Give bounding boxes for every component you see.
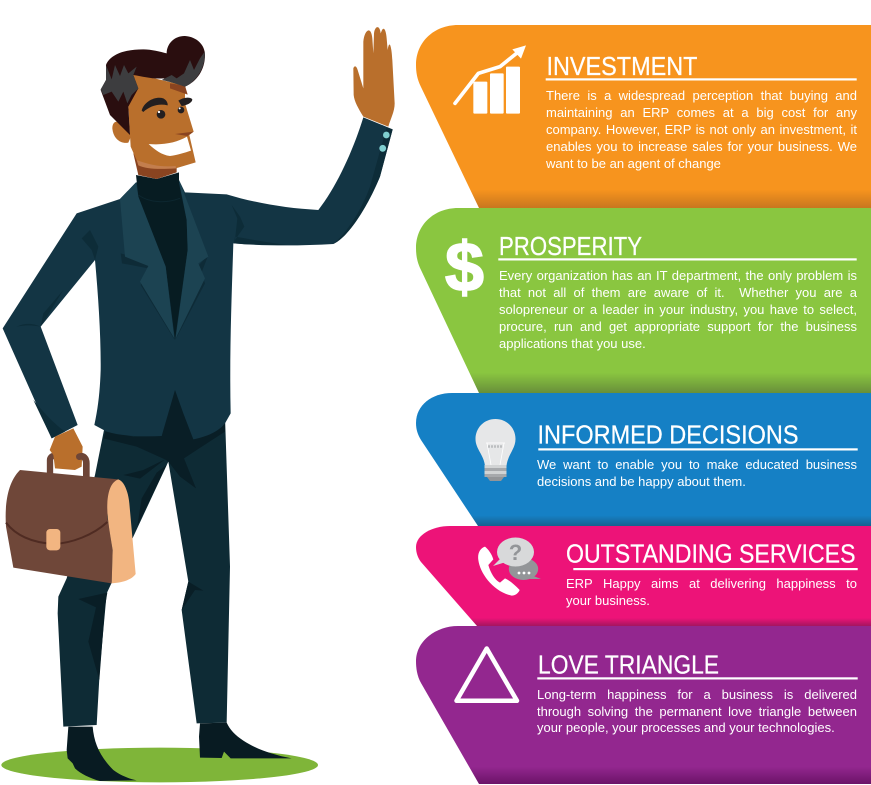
heading: prosperity: PROSPERITY [499, 231, 642, 261]
prosperity text: applications that you use. [499, 336, 646, 351]
cuff buttons [383, 132, 390, 138]
smile [149, 137, 191, 156]
hair [101, 36, 205, 135]
face [128, 73, 196, 168]
heading rule [573, 568, 858, 570]
panel: love triangle [416, 626, 871, 784]
panel: informed decisions [416, 393, 871, 526]
icon: dollar sign: $ [445, 228, 484, 306]
jacket [3, 117, 393, 439]
outstanding services text: ERP Happy aims at delivering happiness to [566, 576, 857, 591]
heading rule [538, 448, 858, 450]
turtleneck [136, 172, 188, 340]
heading: love triangle: LOVE TRIANGLE [538, 649, 719, 679]
cuff button [379, 145, 386, 152]
informed decisions background and icon [416, 393, 871, 526]
investment text [546, 88, 857, 171]
shoes [67, 723, 292, 781]
informed decisions text: We want to enable you to make educated business [537, 457, 857, 472]
ground ellipse [1, 748, 318, 782]
eyes [157, 110, 165, 119]
prosperity text: Every organization has an IT department, the only problem is [499, 268, 857, 283]
icon: phone with speech bubbles [478, 538, 541, 596]
investment text: maintaining an ERP comes at a big cost for any [546, 105, 857, 120]
investment text: There is a widespread perception that buying and [546, 88, 857, 103]
briefcase [6, 456, 136, 583]
outstanding services background and icon [416, 526, 871, 626]
informed decisions text [537, 457, 857, 489]
blue banner [416, 393, 871, 526]
outstanding services text: your business. [566, 593, 650, 608]
love triangle text [537, 687, 857, 735]
investment text: want to be an agent of change [546, 156, 721, 171]
prosperity text [499, 268, 857, 351]
love triangle text: Long-term happiness for a business is delivered [537, 687, 857, 702]
love triangle text: through solving the permanent love triangle between [537, 704, 857, 719]
prosperity text: solopreneur or a leader in your industry, you have to select, [499, 302, 857, 317]
prosperity text: that not all of them are aware of it. Whether you are a [499, 285, 857, 300]
ear [112, 122, 132, 143]
heading rule [498, 258, 857, 260]
neck [133, 153, 177, 179]
lower hand [50, 428, 83, 470]
raised hand [353, 27, 395, 127]
nose shadow [175, 132, 194, 136]
prosperity background and icon [416, 208, 871, 393]
prosperity text: procure, run and get appropriate support for the business [499, 319, 857, 334]
panel: investment [416, 25, 871, 208]
heading rule [546, 78, 857, 80]
heading: informed decisions: INFORMED DECISIONS [538, 419, 798, 449]
panel: prosperity [416, 208, 871, 393]
icon: phone with speech bubbles: ? [509, 540, 522, 565]
eyebrows [142, 98, 168, 112]
heading: investment: INVESTMENT [546, 51, 698, 81]
pink banner [416, 526, 871, 626]
illustration: businessman waving with briefcase [1, 27, 395, 782]
love triangle text: your people, your processes and your technologies. [537, 720, 835, 735]
informed decisions text: decisions and be happy about them. [537, 474, 746, 489]
orange banner [416, 25, 871, 208]
legs [58, 387, 230, 727]
panel: outstanding services [416, 526, 871, 626]
head [101, 36, 205, 179]
purple banner [416, 626, 871, 784]
icon: light bulb [476, 419, 516, 481]
briefcase handle back [50, 455, 58, 475]
love triangle background and icon [416, 626, 871, 784]
investment text: enables you to increase sales for your business. We [546, 139, 857, 154]
investment text: company. However, ERP is not only an investment, it [546, 122, 857, 137]
investment background and icon [416, 25, 871, 208]
heading rule [537, 677, 858, 680]
green banner [416, 208, 871, 393]
icon: rising bar chart [455, 45, 526, 114]
lapels [121, 253, 208, 339]
outstanding services text [566, 576, 857, 608]
icon: triangle [456, 648, 517, 701]
